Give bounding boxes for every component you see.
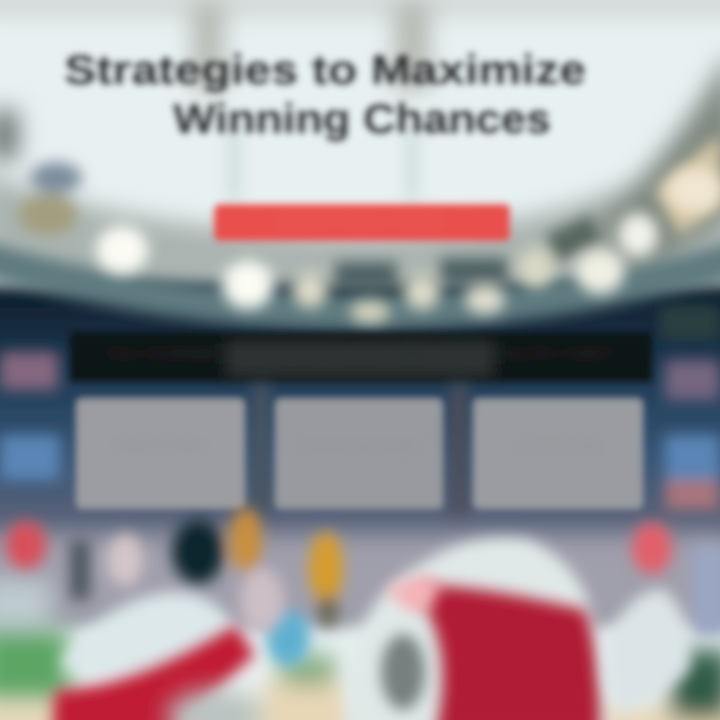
stadium stands and crowd [0, 240, 720, 625]
subtitle text: Key strategies that improve your odds of winning the match [105, 343, 615, 362]
figure: large ball / player in red and white [345, 538, 610, 720]
title [64, 46, 586, 142]
figure: background players [6, 508, 720, 666]
panel gaps: pillars [252, 385, 468, 515]
dark subtitle band [70, 332, 652, 382]
figure: left player in white and red [52, 592, 263, 720]
panel: strategy 1: Study the teams [113, 438, 207, 453]
panel: strategy 3 [473, 398, 643, 509]
panel: strategy 3: Track the odds [515, 438, 601, 453]
banner text: Expert Game Guide [278, 212, 446, 232]
foreground: pitch and crowd [0, 535, 720, 720]
panel: strategy 2 [275, 398, 443, 509]
title: Winning Chances [173, 95, 551, 142]
panel: strategy 1 [76, 398, 245, 509]
title: Strategies to Maximize [64, 46, 586, 93]
red banner [214, 204, 510, 241]
figure: right player [605, 590, 691, 715]
roof lights [96, 168, 720, 323]
panel: strategy 2: Manage your budget [299, 438, 419, 453]
